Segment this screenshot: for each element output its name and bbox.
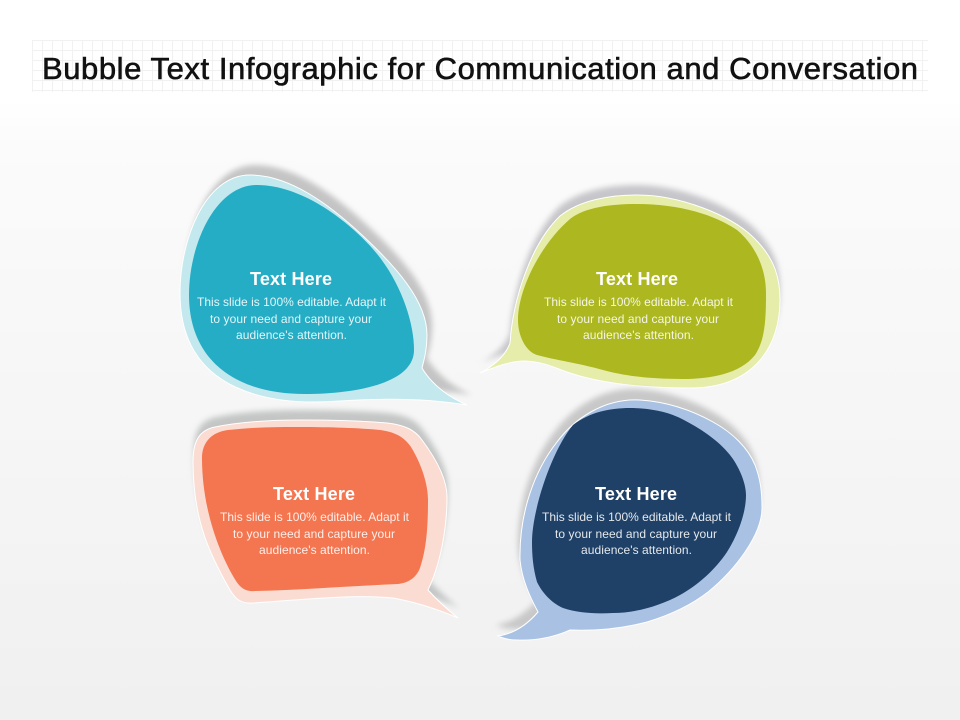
body text [544,295,734,342]
body text: to your need and capture your [233,527,395,541]
heading: Text Here [596,269,678,289]
panel: teal speech bubble [180,165,472,405]
title grid backdrop [32,40,928,92]
body text: to your need and capture your [210,312,372,326]
body text: audience's attention. [236,328,347,342]
body text: audience's attention. [259,543,370,557]
panel: navy speech bubble [496,389,762,640]
body text [220,510,410,557]
body text: This slide is 100% editable. Adapt it [197,295,387,309]
body text [542,510,732,557]
panel: orange speech bubble [193,410,459,618]
heading: Text Here [273,484,355,504]
panel: green speech bubble [480,185,780,388]
body text: audience's attention. [581,543,692,557]
body text: audience's attention. [583,328,694,342]
body text: to your need and capture your [555,527,717,541]
body text: This slide is 100% editable. Adapt it [544,295,734,309]
body text [197,295,387,342]
body text: This slide is 100% editable. Adapt it [220,510,410,524]
heading: Text Here [595,484,677,504]
heading: Text Here [250,269,332,289]
body text: to your need and capture your [557,312,719,326]
title: Bubble Text Infographic for Communication and Conversation [42,51,918,86]
body text: This slide is 100% editable. Adapt it [542,510,732,524]
